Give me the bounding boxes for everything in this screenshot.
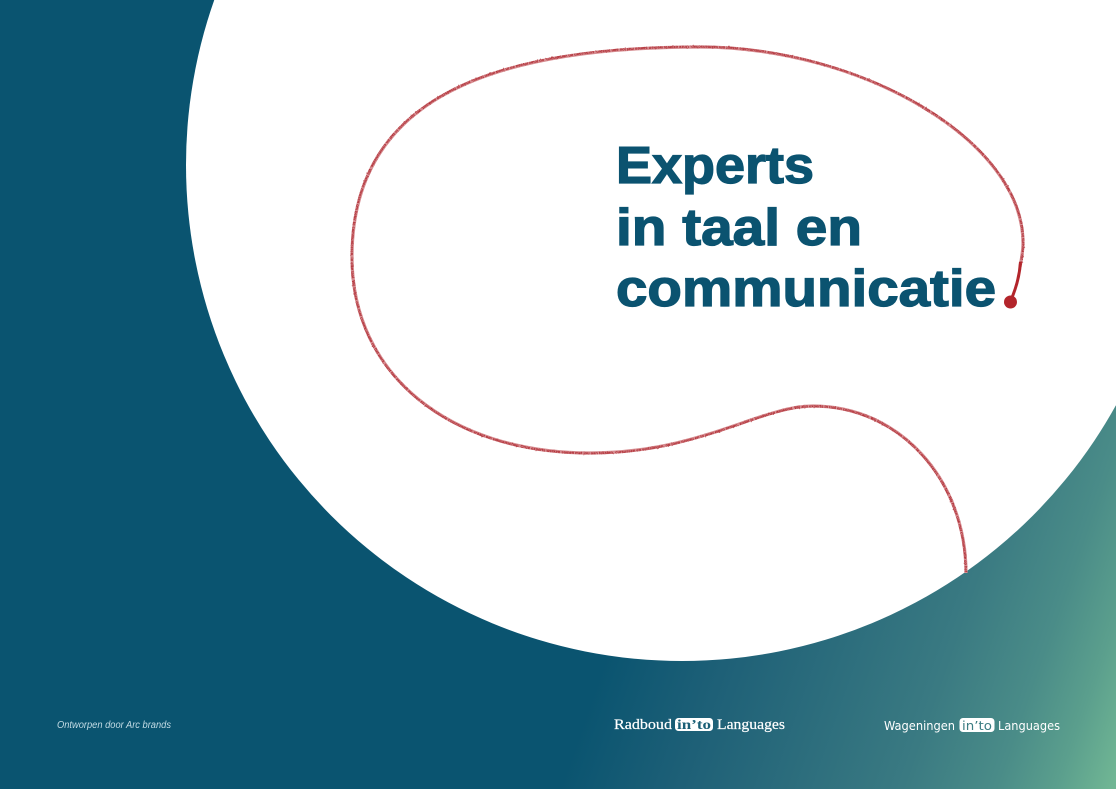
logo: Wageningen into Languages: Languages [998,719,1060,733]
logo: Radboud into Languages: in’to [677,717,711,732]
logo: Radboud into Languages: Radboud [614,717,673,733]
red text rope line: Wij zijn experts in taal en communicatie. Wij helpen mensen om beter te communiceren, in elke taal. Wij helpen ook met communicatie op het werk, want taal verbindt mensen en professionele communicatie vraagt om vakmanschap. Onze experts werken samen met jou aan teksten, cursussen en vertalingen, op jouw niveau en in jouw eigen tempo, zodat je boodschap aankomt. Wij zijn experts in taal en communicatie. Wij helpen mensen om beter te communiceren, in elke taal. Wij helpen ook met communicatie op het werk, want taal verbindt mensen en professionele communicatie vraagt om vakmanschap. Onze experts werken samen met jou aan teksten, cursussen en vertalingen, op jouw niveau en in jouw eigen tempo, zodat je boodschap aankomt. Wij zijn experts in taal en communicatie. Wij helpen mensen om beter te communiceren, in elke taal. Wij helpen ook met communicatie op het werk, want taal verbindt mensen en professionele communicatie vraagt om vakmanschap. Onze experts werken samen met jou aan teksten, cursussen en vertalingen. [350,44,1026,572]
title [616,137,996,318]
logo: Wageningen into Languages: Wageningen [884,719,955,733]
logo: Radboud into Languages: Languages [717,717,785,733]
rope end with red dot [1004,262,1020,308]
logo: Wageningen into Languages [884,718,1060,733]
title: Experts [616,137,814,195]
logo: Radboud into Languages [614,717,785,733]
logo: Wageningen into Languages: in’to [962,718,992,733]
title: communicatie [616,260,996,318]
white circle [186,0,1116,661]
title: in taal en [616,199,862,257]
designer credit: Ontworpen door Arc brands [57,720,171,731]
